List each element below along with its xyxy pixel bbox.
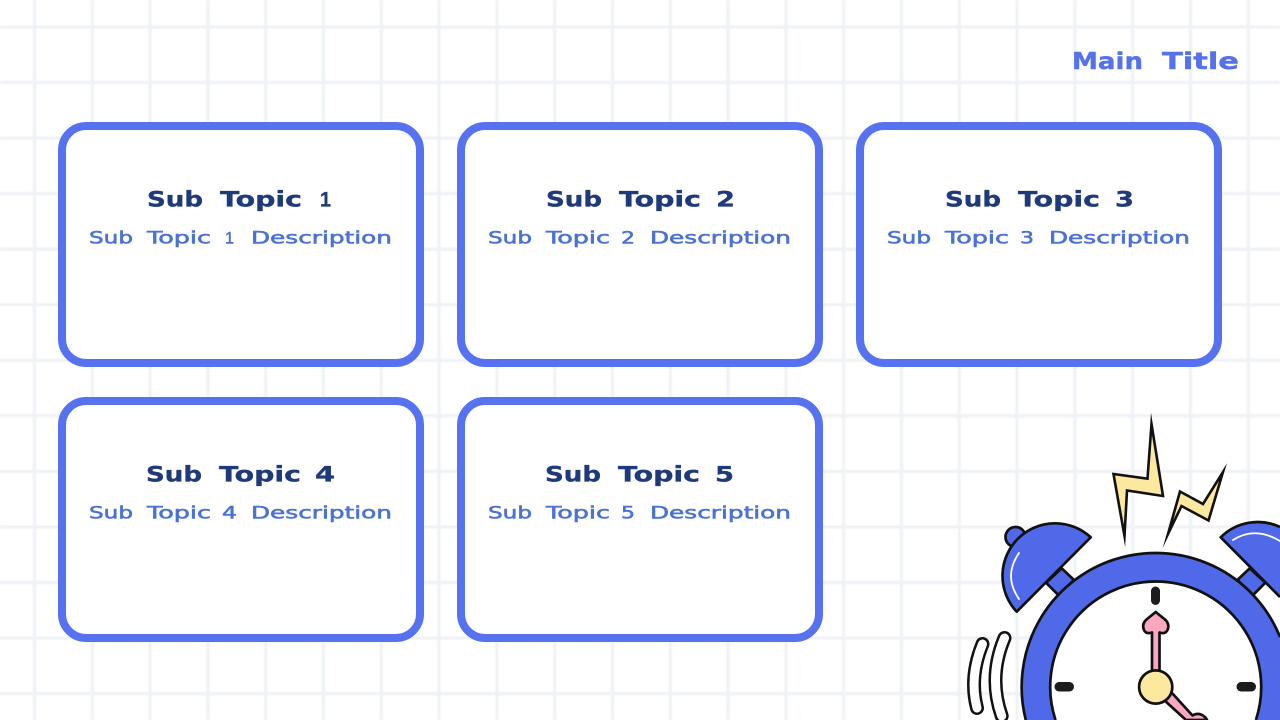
heading: sub topic 1: 1 bbox=[320, 188, 331, 212]
title: Title bbox=[1162, 47, 1239, 75]
description: sub topic 1: Topic bbox=[146, 228, 211, 248]
panel: sub topic 4 bbox=[62, 401, 420, 638]
description: sub topic 5: 5 bbox=[621, 504, 635, 524]
icon: hour ticks bbox=[1054, 586, 1256, 692]
panel: sub topic 1 bbox=[62, 126, 420, 363]
panel: sub topic 3 bbox=[860, 126, 1218, 363]
heading: sub topic 1: Topic bbox=[220, 188, 302, 212]
description: sub topic 4: Topic bbox=[146, 504, 211, 524]
heading: sub topic 5: Topic bbox=[618, 462, 700, 486]
icon: right bell bbox=[1221, 522, 1280, 597]
description: sub topic 3: Description bbox=[1049, 228, 1190, 248]
description: sub topic 5: Description bbox=[650, 504, 791, 524]
icon: clock centre pin bbox=[1139, 670, 1172, 704]
description: sub topic 3: Sub bbox=[887, 228, 931, 248]
description: sub topic 4: 4 bbox=[222, 504, 237, 524]
icon: left bell bbox=[1003, 523, 1091, 612]
heading: sub topic 1: Sub bbox=[147, 188, 203, 212]
heading: sub topic 4: Sub bbox=[146, 462, 202, 486]
heading: sub topic 5: Sub bbox=[545, 462, 601, 486]
heading: sub topic 4: 4 bbox=[315, 462, 335, 486]
heading: sub topic 5: 5 bbox=[715, 462, 734, 486]
panel: sub topic 5 bbox=[461, 401, 819, 638]
heading: sub topic 2: Sub bbox=[546, 188, 602, 212]
icon: small lightning bolt bbox=[1168, 472, 1223, 534]
description: sub topic 1: Sub bbox=[89, 228, 133, 248]
description: sub topic 2: Topic bbox=[545, 228, 610, 248]
description: sub topic 4: Description bbox=[251, 504, 392, 524]
description: sub topic 3: 3 bbox=[1020, 228, 1034, 248]
description: sub topic 2: 2 bbox=[621, 228, 635, 248]
icon: clock ring and face bbox=[1022, 553, 1280, 720]
description: sub topic 4: Sub bbox=[89, 504, 133, 524]
heading: sub topic 2: Topic bbox=[619, 188, 701, 212]
icon: alarm clock bbox=[974, 424, 1280, 720]
description: sub topic 1: Description bbox=[251, 228, 392, 248]
description: sub topic 3: Topic bbox=[944, 228, 1009, 248]
heading: sub topic 3: Sub bbox=[945, 188, 1001, 212]
icon: large lightning bolt bbox=[1114, 424, 1163, 536]
heading: sub topic 3: 3 bbox=[1115, 188, 1134, 212]
heading: sub topic 3: Topic bbox=[1018, 188, 1100, 212]
description: sub topic 5: Topic bbox=[545, 504, 610, 524]
heading: sub topic 4: Topic bbox=[219, 462, 301, 486]
panel: sub topic 2 bbox=[461, 126, 819, 363]
icon: vibration lines bbox=[974, 638, 1004, 716]
description: sub topic 2: Sub bbox=[488, 228, 532, 248]
icon: clock hands bbox=[1143, 612, 1207, 720]
description: sub topic 5: Sub bbox=[488, 504, 532, 524]
description: sub topic 1: 1 bbox=[225, 228, 234, 248]
title: Main bbox=[1072, 47, 1143, 75]
heading: sub topic 2: 2 bbox=[716, 188, 735, 212]
description: sub topic 2: Description bbox=[650, 228, 791, 248]
